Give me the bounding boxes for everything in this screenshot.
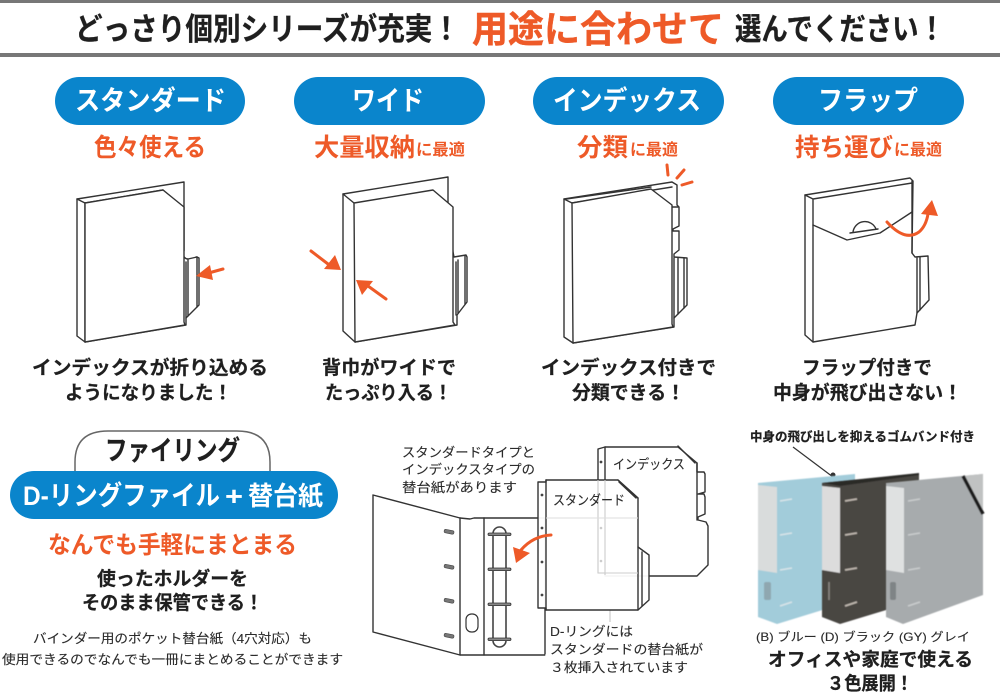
label pill: D-ring file: + [225, 481, 243, 511]
arrow: index tab folds in [196, 265, 223, 280]
folder illustration: index [564, 182, 687, 343]
subtitle: flap: に最適 [894, 140, 942, 159]
subtitle: standard: 色々使える [94, 134, 206, 162]
panel: standard [32, 77, 268, 404]
subtitle: flap [795, 134, 942, 162]
panel: index [533, 77, 724, 404]
note: D-ring refills: スタンダードの替台紙が [550, 642, 703, 657]
note: refill types: スタンダードタイプと [402, 445, 535, 460]
binder photo: gray [886, 474, 983, 624]
D-rings [488, 527, 511, 647]
subtitle: filing: なんでも手軽にまとまる [48, 532, 297, 559]
note: D-ring refills [546, 622, 706, 675]
subtitle: wide [314, 134, 465, 162]
colour legend: (B) ブルー (D) ブラック (GY) グレイ [756, 629, 970, 644]
callout: rubber band [750, 429, 975, 478]
callout: rubber band: 中身の飛び出しを抑えるゴムバンド付き [750, 429, 975, 444]
panel: wide [294, 77, 485, 404]
arrows: wide spine [311, 251, 386, 299]
arrow: insert refill [513, 535, 551, 563]
description: flap: フラップ付きで [802, 357, 932, 379]
subtitle: index: に最適 [630, 140, 678, 159]
description: standard: ようになりました！ [65, 382, 232, 404]
refill: index: インデックス [613, 456, 685, 472]
label pill: D-ring file [10, 471, 338, 519]
label pill: wide [294, 77, 485, 125]
description: index: 分類できる！ [572, 382, 685, 404]
label pill: standard [55, 77, 245, 125]
title [75, 9, 945, 50]
title: どっさり個別シリーズが充実！ [75, 12, 460, 47]
binder cover slots [444, 529, 454, 639]
tab heading: filing: ファイリング [105, 435, 240, 466]
label pill: wide: ワイド [352, 86, 424, 116]
panel: flap [773, 77, 964, 404]
label pill: index [533, 77, 724, 125]
description: filing [82, 567, 263, 614]
refill: index [598, 446, 708, 576]
description: flap [773, 357, 962, 404]
note: refill types [402, 445, 535, 495]
note: filing [2, 631, 343, 667]
description: flap: 中身が飛び出さない！ [773, 381, 962, 404]
folder illustration: wide [343, 177, 467, 342]
refill: standard [538, 480, 649, 610]
binder photo: blue [758, 474, 855, 624]
note: filing: バインダー用のポケット替台紙（4穴対応）も [33, 631, 312, 646]
panel: filing [2, 431, 343, 667]
subtitle: index [577, 134, 678, 162]
tab heading: filing [75, 431, 270, 472]
subtitle: wide: に最適 [416, 140, 465, 159]
panel: colour variations [750, 429, 983, 692]
label pill: flap: フラップ [818, 86, 918, 116]
diagram: binder and refills [373, 445, 708, 675]
description: index: インデックス付きで [541, 356, 716, 379]
description: colours [768, 649, 973, 692]
binder [373, 495, 610, 655]
description: wide [322, 356, 456, 404]
description: standard: インデックスが折り込める [32, 356, 268, 379]
description: index [541, 356, 716, 404]
title: 選んでください！ [735, 12, 945, 47]
burst marks [667, 165, 692, 185]
refill: standard: スタンダード [553, 493, 625, 508]
label pill: standard: スタンダード [75, 85, 226, 116]
folder illustration: flap [805, 178, 929, 342]
description: standard [32, 356, 268, 404]
subtitle: index: 分類 [577, 134, 628, 162]
note: D-ring refills: ３枚挿入されています [550, 660, 688, 675]
description: filing: 使ったホルダーを [97, 567, 248, 590]
binder photo: black [822, 473, 919, 624]
label pill: index: インデックス [553, 85, 701, 116]
title: 用途に合わせて [472, 9, 724, 50]
description: colours: オフィスや家庭で使える [768, 649, 973, 670]
arrow: flap opens [887, 200, 938, 235]
description: wide: たっぷり入る！ [325, 382, 452, 404]
label pill: D-ring file: D-リングファイル [23, 480, 220, 511]
folder illustration: standard [77, 182, 199, 342]
label pill: D-ring file: 替台紙 [248, 481, 323, 511]
note: filing: 使用できるのでなんでも一冊にまとめることができます [2, 652, 343, 667]
label pill: flap [773, 77, 964, 125]
note: refill types: インデックスタイプの [402, 462, 535, 477]
description: wide: 背巾がワイドで [322, 356, 456, 379]
note: D-ring refills: D-リングには [550, 624, 633, 639]
subtitle: flap: 持ち運び [795, 134, 893, 162]
description: filing: そのまま保管できる！ [82, 591, 263, 614]
subtitle: wide: 大量収納 [314, 134, 415, 162]
note: refill types: 替台紙があります [402, 480, 517, 495]
